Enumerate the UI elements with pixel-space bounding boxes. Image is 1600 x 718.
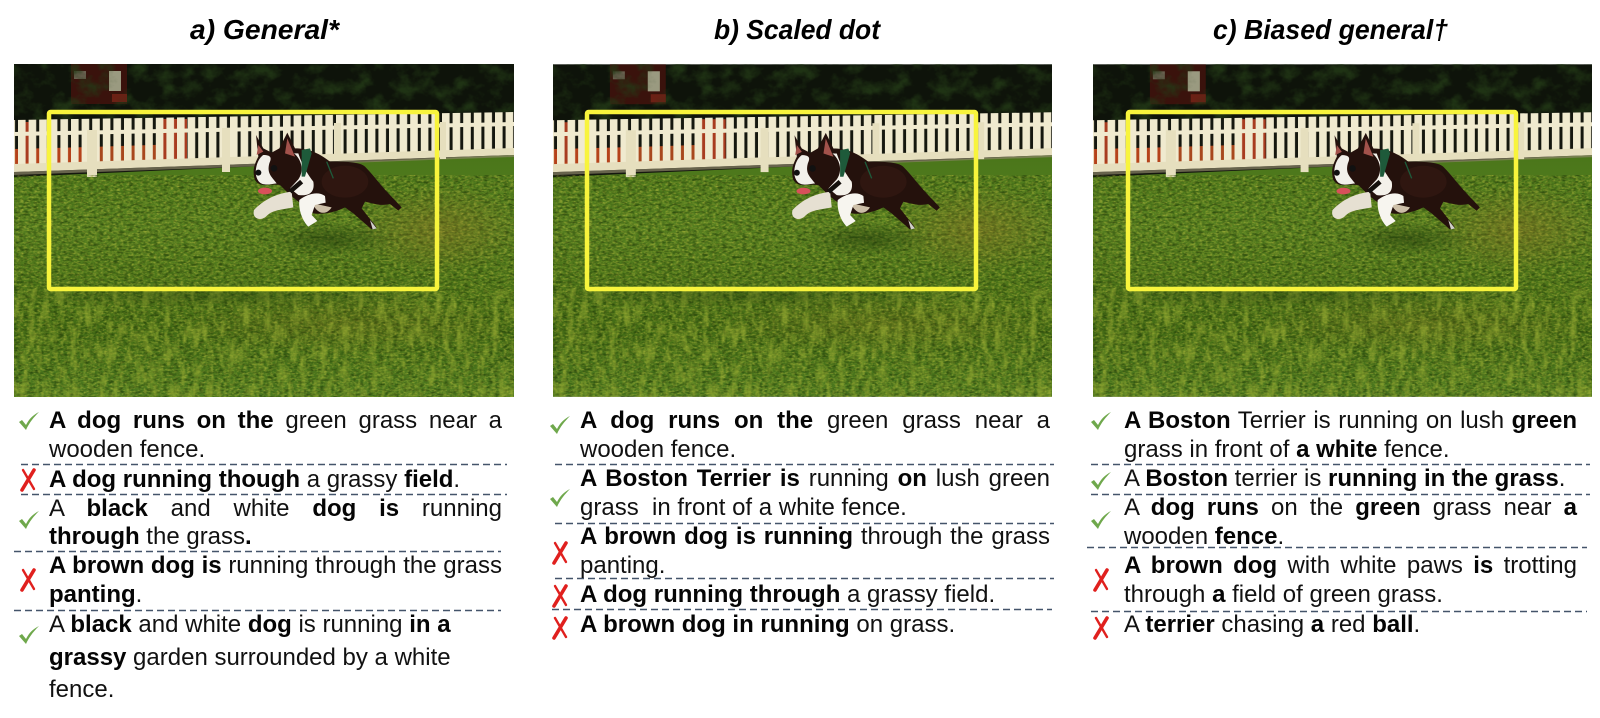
captions: column c: wooden fence. bbox=[1124, 523, 1284, 550]
captions: column b: A dog runs on the green grass near a bbox=[580, 407, 1050, 434]
captions: column c: A Boston Terrier is running on lush green bbox=[1124, 407, 1577, 434]
captions: column b bbox=[580, 407, 1050, 638]
captions: column a: A dog runs on the green grass near a bbox=[49, 407, 502, 434]
captions: column b: A brown dog is running through the grass bbox=[580, 523, 1050, 550]
captions: column b: panting. bbox=[580, 552, 665, 579]
captions: column a: A dog running though a grassy field. bbox=[49, 466, 460, 493]
marks for column a bbox=[19, 412, 39, 644]
captions: column b: grass in front of a white fence. bbox=[580, 494, 907, 521]
captions: column b: A dog running through a grassy field. bbox=[580, 581, 995, 608]
captions: column c: through a field of green grass. bbox=[1124, 581, 1443, 608]
captions: column c: A Boston terrier is running in the grass. bbox=[1124, 465, 1565, 492]
captions: column b: wooden fence. bbox=[580, 436, 736, 463]
title: c) Biased general†: c) Biased general† bbox=[1213, 14, 1448, 45]
captions: column a bbox=[49, 407, 502, 703]
captions: column a: panting. bbox=[49, 581, 142, 608]
title: b) Scaled dot: b) Scaled dot bbox=[714, 14, 882, 45]
captions: column a: wooden fence. bbox=[49, 436, 205, 463]
captions: column a: A black and white dog is running in a bbox=[49, 611, 451, 638]
captions: column b: A brown dog in running on grass. bbox=[580, 611, 955, 638]
title: a) General*: a) General* bbox=[190, 14, 340, 45]
captions: column a: fence. bbox=[49, 676, 114, 703]
captions: column c: grass in front of a white fence. bbox=[1124, 436, 1449, 463]
marks for column c bbox=[1091, 412, 1111, 638]
captions: column c: A brown dog with white paws is trotting bbox=[1124, 552, 1577, 579]
photo b: dog running on grass with attention box bbox=[513, 64, 1062, 397]
photo c: dog running on grass with attention box bbox=[1053, 64, 1600, 397]
captions: column a: A brown dog is running through the grass bbox=[49, 552, 502, 579]
marks for column b bbox=[550, 416, 570, 638]
captions: column a: grassy garden surrounded by a white bbox=[49, 644, 451, 671]
photo a: dog running on grass with attention box bbox=[0, 64, 524, 397]
captions: column c bbox=[1124, 407, 1578, 638]
captions: column c: A terrier chasing a red ball. bbox=[1124, 611, 1420, 638]
captions: column c: A dog runs on the green grass near a bbox=[1124, 494, 1577, 521]
captions: column a: A black and white dog is running bbox=[49, 495, 502, 522]
captions: column a: through the grass. bbox=[49, 523, 252, 550]
captions: column b: A Boston Terrier is running on lush green bbox=[580, 465, 1050, 492]
